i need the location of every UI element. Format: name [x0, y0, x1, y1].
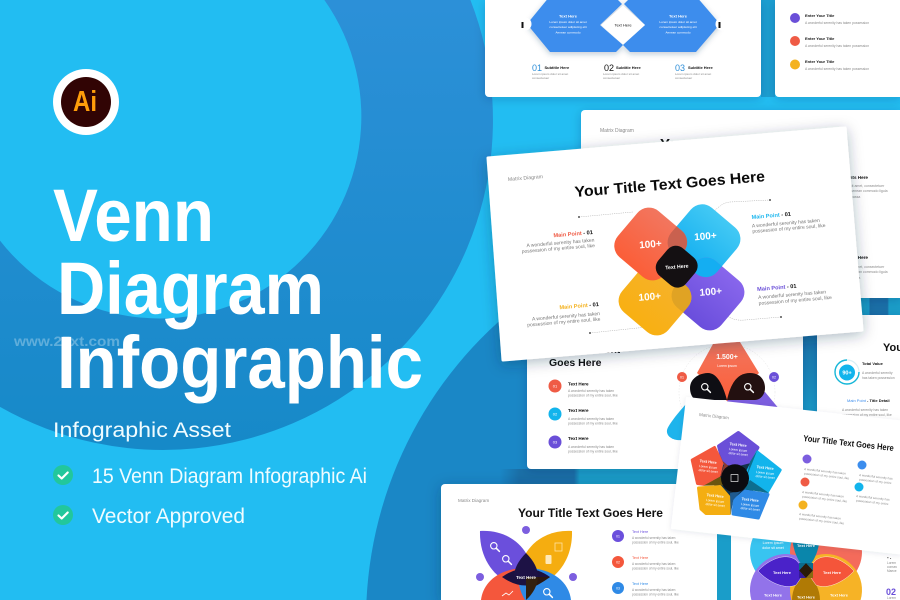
- list item 01: [548, 380, 618, 398]
- triple venn: 02: [772, 376, 776, 380]
- pentagon diagram: dolor sit amet: [698, 468, 718, 474]
- leaf diagram: [476, 526, 577, 600]
- subtitle columns: Subtitle Here: [544, 65, 570, 70]
- slide: top hexagon diagram: Lorem ipsum dolor sit amet: [549, 20, 587, 24]
- callout: purple main point: Main Point - 01: [757, 284, 797, 293]
- slide: pentagon venn: Matrix Diagram: [699, 412, 729, 420]
- slide: top hexagon diagram: Aenean commodo: [555, 30, 581, 34]
- slide band below rear slide: [850, 297, 900, 315]
- callout: purple main point: possession of my entire soul, like: [758, 295, 832, 307]
- Ai logo badge: [53, 69, 119, 135]
- slide: top right list: A wonderful serenity has taken possession: [805, 21, 869, 25]
- icons with notes: possession of my entire soul, like: [802, 495, 848, 504]
- icons with notes: A wonderful serenity has taken: [802, 490, 844, 499]
- strip below middle slide: [500, 469, 690, 484]
- circle venn: Text Here: [797, 594, 816, 600]
- venn squares: Text Here: [665, 264, 689, 271]
- slide: four circle venn: Maece: [887, 569, 897, 573]
- slide: top hexagon diagram: consectetuer adipiscing elit: [549, 25, 587, 29]
- slide: rear matrix diagram: Aenean commodo ligula: [850, 189, 888, 193]
- slide: triple venn with list: Goes Here: [549, 357, 602, 369]
- list item purple: possession of my entire soul, like: [632, 540, 679, 544]
- slide: four circle venn: 02: [886, 587, 896, 597]
- callout: yellow main point: A wonderful serenity has taken: [532, 311, 600, 323]
- callout: blue main point: Main Point - 01: [751, 212, 791, 221]
- subtitle columns: 03: [675, 63, 685, 73]
- slide: leaf venn: Matrix Diagram: [458, 498, 489, 503]
- slide: rear matrix diagram: Your: [660, 136, 693, 153]
- list item 03: 03: [553, 440, 558, 444]
- pentagon diagram: dolor sit amet: [755, 474, 775, 480]
- pentagon diagram: Text Here: [699, 459, 717, 465]
- triple venn: Lorem ipsum: [717, 364, 737, 368]
- slide: triple venn with list: Your Title Text: [549, 344, 621, 356]
- list item 03: [548, 436, 618, 454]
- subtitle columns: Subtitle Here: [688, 65, 713, 70]
- circle venn: Lorem ipsum: [763, 541, 783, 545]
- slide: main four-square venn: [488, 128, 862, 360]
- callout: purple main point: A wonderful serenity has taken: [758, 289, 827, 301]
- slide: total value: [817, 315, 900, 435]
- pentagon diagram: Text Here: [741, 497, 759, 503]
- pentagon diagram: Lorem ipsum: [756, 470, 775, 476]
- slide: top hexagon diagram: Text Here: [614, 22, 632, 28]
- callout: blue main point: possession of my entire soul, like: [752, 223, 826, 235]
- circle venn: Text Here: [823, 570, 842, 575]
- slide: four circle venn: Lorem: [887, 596, 896, 600]
- circle venn: dolor sit amet: [762, 546, 784, 550]
- center diamond: [601, 6, 645, 44]
- list item red: possession of my entire soul, like: [632, 566, 679, 570]
- slide: rear matrix diagram: Main Points Here: [831, 255, 868, 260]
- list item purple: A wonderful serenity has taken: [632, 536, 676, 540]
- venn squares: [614, 204, 744, 336]
- main heading: Diagram: [57, 247, 324, 330]
- main heading: [53, 174, 423, 404]
- callout: red main point: possession of my entire soul, like: [522, 243, 595, 255]
- slide: total value: has taken possession: [862, 376, 895, 380]
- slide: main four-square venn: Matrix Diagram: [508, 174, 543, 183]
- slide: total value: A wonderful serenity has taken: [842, 408, 888, 412]
- slide: top hexagon diagram: [485, 0, 761, 97]
- venn squares: 100+: [638, 291, 662, 304]
- feature: 15 venn diagrams: 15 Venn Diagram Infographic Ai: [92, 465, 367, 488]
- pentagon diagram: Text Here: [756, 465, 774, 471]
- slide: top right list: A wonderful serenity has taken possession: [805, 44, 869, 48]
- subtitle columns: Lorem ipsum dolor sit amet: [675, 72, 711, 76]
- pentagon diagram: Lorem ipsum: [741, 502, 760, 508]
- callout dots: [578, 199, 782, 334]
- list item blue: [612, 582, 679, 596]
- list item 01: 01: [553, 384, 558, 388]
- slide: rear matrix diagram: sit amet, consectetuer: [850, 184, 885, 188]
- slide: total value: - Title Detail: [867, 398, 890, 403]
- feature: vector approved: Vector Approved: [92, 505, 245, 528]
- callout: blue main point: [751, 212, 826, 235]
- strip between top slides: [761, 0, 775, 97]
- icons with notes: A wonderful serenity has taken: [804, 467, 846, 476]
- slide: four circle venn: consec: [887, 565, 898, 569]
- slide: top right list: Enter Your Title: [805, 36, 835, 41]
- callout: red main point: A wonderful serenity has taken: [526, 237, 595, 249]
- slide: four circle venn: - .: [887, 555, 892, 561]
- callout: red main point: [522, 230, 595, 255]
- list item blue: A wonderful serenity has taken: [632, 588, 676, 592]
- list item 02: 02: [553, 412, 558, 416]
- slide: total value: Main Point: [847, 398, 867, 403]
- slide: leaf venn: Your Title Text Goes Here: [518, 508, 663, 520]
- icons with notes: A wonderful serenity has taken: [799, 512, 841, 521]
- list item 02: [548, 408, 618, 426]
- triple venn: [667, 342, 780, 440]
- list item 01: possession of my entire soul, like: [568, 394, 618, 398]
- callout: red main point: Main Point - 01: [553, 230, 593, 239]
- subtitle columns: Lorem ipsum dolor sit amet: [532, 72, 568, 76]
- pentagon diagram: Text Here: [706, 493, 724, 499]
- slide: total value: Total Value: [862, 361, 884, 366]
- slide: rear matrix diagram: massa: [850, 195, 860, 199]
- subtitle: Infographic Asset: [53, 419, 231, 442]
- left hexagon: [527, 0, 623, 52]
- slide: top right list: Enter Your Title: [805, 59, 835, 64]
- list item 01: A wonderful serenity has taken: [568, 389, 614, 393]
- slide: top hexagon diagram: Text Here: [669, 14, 688, 18]
- pentagon diagram: dolor sit amet: [740, 506, 760, 512]
- pentagon diagram: [692, 432, 780, 518]
- list item red: 02: [616, 560, 620, 564]
- subtitle columns: consectetuer: [675, 76, 692, 80]
- subtitle columns: [532, 63, 713, 80]
- pentagon diagram: Lorem ipsum: [699, 464, 718, 470]
- list item 02: possession of my entire soul, like: [568, 422, 618, 426]
- circle venn: [750, 516, 862, 600]
- callout: purple main point: [757, 284, 832, 307]
- slide: top right list: [775, 0, 900, 97]
- list item 02: A wonderful serenity has taken: [568, 417, 614, 421]
- subtitle columns: 01: [532, 63, 542, 73]
- pentagon diagram: Lorem ipsum: [729, 447, 748, 453]
- icons with notes: possession of my entire: [856, 499, 889, 506]
- subtitle columns: 02: [604, 63, 614, 73]
- list item blue: 03: [616, 586, 620, 590]
- list item 03: A wonderful serenity has taken: [568, 445, 614, 449]
- slide: top right list: Enter Your Title: [805, 13, 835, 18]
- slide: total value: A wonderful serenity: [862, 371, 893, 375]
- subtitle columns: Subtitle Here: [616, 65, 641, 70]
- list item red: [612, 556, 679, 570]
- callout: yellow main point: Main Point - 01: [559, 302, 599, 311]
- subtitle columns: consectetuer: [532, 76, 549, 80]
- circle venn: Text Here: [830, 592, 849, 598]
- venn squares: 100+: [699, 286, 723, 299]
- subtitle columns: Lorem ipsum dolor sit amet: [603, 72, 639, 76]
- title: Your Title Text Goes Here: [574, 168, 766, 201]
- slide: top hexagon diagram: consectetuer adipiscing elit: [659, 25, 697, 29]
- callout: yellow main point: possession of my entire soul, like: [527, 316, 601, 329]
- slide: rear matrix diagram: [581, 110, 900, 298]
- slide: top hexagon diagram: Text Here: [559, 14, 578, 18]
- circle venn: Text Here: [773, 570, 792, 575]
- slide: total value: possession of my entire soul, like: [842, 413, 892, 417]
- watermark: www.25xt.com: [13, 334, 120, 349]
- leaf diagram: Text Here: [516, 575, 536, 580]
- list item blue: Text Here: [632, 582, 648, 586]
- list item 02: Text Here: [568, 408, 589, 413]
- strip beside middle slide: [803, 330, 817, 412]
- list item 01: Text Here: [568, 382, 589, 386]
- icons with notes: [798, 454, 893, 526]
- venn squares: 100+: [694, 231, 717, 243]
- list item red: A wonderful serenity has taken: [632, 562, 676, 566]
- slide: four circle venn: [731, 516, 900, 600]
- pentagon diagram: dolor sit amet: [705, 502, 725, 508]
- icons with notes: A wonderful serenity has: [859, 473, 893, 481]
- circle venn: Text Here: [797, 543, 816, 548]
- slide: rear matrix diagram: Main Points Here: [831, 175, 868, 180]
- right hexagon: [623, 0, 720, 52]
- slide: top hexagon diagram: Aenean commodo: [665, 30, 691, 34]
- triple venn: 1.500+: [716, 354, 738, 361]
- slide: triple venn with list: [527, 325, 803, 469]
- slide: four circle venn: Lorem: [887, 561, 896, 565]
- list item 03: possession of my entire soul, like: [568, 450, 618, 454]
- progress ring: 90+: [842, 370, 852, 376]
- icons with notes: A wonderful serenity has: [856, 494, 890, 502]
- strip beside circle venn slide: [717, 530, 731, 600]
- slide: leaf venn: [441, 484, 717, 600]
- callout: blue main point: A wonderful serenity has taken: [752, 218, 820, 229]
- callout lines: [579, 200, 781, 333]
- icons with notes: possession of my entire: [859, 478, 892, 485]
- icons with notes: possession of my entire soul, like: [799, 517, 845, 526]
- pentagon diagram: dolor sit amet: [728, 451, 748, 457]
- list item purple: 01: [616, 534, 620, 538]
- main heading: Venn: [53, 174, 214, 257]
- slide: rear matrix diagram: sit amet, consectetuer: [850, 265, 885, 269]
- pentagon diagram: Lorem ipsum: [706, 498, 725, 504]
- slide: rear matrix diagram: Aenean commodo ligula: [850, 270, 888, 274]
- list item red: Text Here: [632, 556, 648, 560]
- pentagon diagram: Text Here: [729, 442, 747, 448]
- slide: pentagon venn: [672, 398, 900, 553]
- triple venn: 01: [680, 376, 684, 380]
- slide: rear matrix diagram: massa: [850, 276, 860, 280]
- list item purple: Text Here: [632, 530, 648, 534]
- main heading: Infographic: [57, 321, 423, 404]
- list item blue: possession of my entire soul, like: [632, 592, 679, 596]
- slide: top hexagon diagram: Lorem ipsum dolor sit amet: [659, 20, 697, 24]
- venn squares: 100+: [639, 239, 662, 251]
- slide: top right list: A wonderful serenity has taken possession: [805, 67, 869, 71]
- icons with notes: possession of my entire soul, like: [804, 472, 850, 481]
- Ai logo badge: Ai: [73, 86, 97, 118]
- list item purple: [612, 530, 679, 544]
- list item 03: Text Here: [568, 436, 589, 441]
- circle venn: Text Here: [764, 592, 783, 598]
- subtitle columns: consectetuer: [603, 76, 620, 80]
- slide: rear matrix diagram: Matrix Diagram: [600, 128, 634, 134]
- callout: yellow main point: [527, 302, 601, 329]
